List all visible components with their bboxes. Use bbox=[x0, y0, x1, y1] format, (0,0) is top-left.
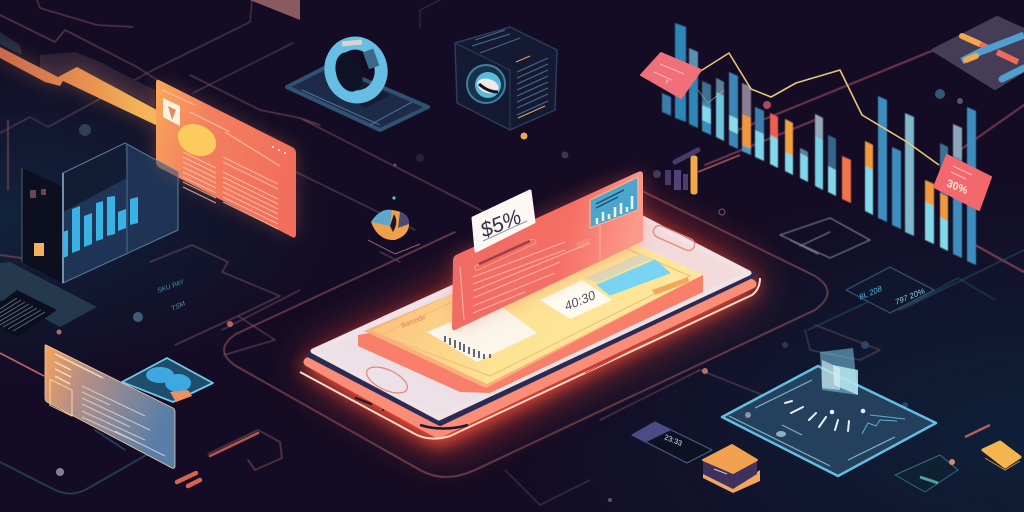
floating folder icon bbox=[820, 348, 858, 395]
panel: glass bar chart box bbox=[22, 143, 178, 283]
card: readout outline right: 8L 208 bbox=[859, 284, 883, 302]
home button bbox=[363, 362, 411, 398]
chart: isometric bars bbox=[662, 23, 976, 265]
icon: small bars and orange cylinder bbox=[653, 150, 740, 195]
header line bbox=[162, 90, 280, 166]
card: small teal card lower right bbox=[895, 455, 958, 492]
card: dark time card bbox=[632, 422, 712, 463]
callout: pink ticket right 30% bbox=[934, 155, 991, 210]
receipt card bbox=[358, 228, 703, 393]
receipt card: Barcode bbox=[400, 314, 427, 330]
blue bars bbox=[63, 196, 138, 258]
chart: trend line bbox=[698, 53, 939, 165]
text: time value: 40:30 bbox=[564, 287, 597, 314]
floating red card bbox=[452, 170, 643, 330]
price tag bbox=[473, 191, 534, 251]
blue box bbox=[597, 260, 670, 295]
panel: bottom left gradient card bbox=[0, 345, 213, 468]
panel: orange document card bbox=[156, 80, 296, 238]
illustration: phone bbox=[300, 205, 766, 450]
callout: pink ticket right 30%: 30% bbox=[945, 177, 969, 197]
top pill bbox=[651, 224, 697, 252]
bezel bbox=[310, 211, 752, 423]
time ticket bbox=[540, 280, 612, 319]
bright edge bbox=[300, 278, 760, 439]
floating red card: 799 bbox=[574, 236, 590, 252]
card: readout outline right bbox=[846, 267, 934, 313]
card text lines bbox=[460, 242, 590, 320]
screen bbox=[313, 209, 749, 418]
text columns bbox=[183, 152, 278, 229]
purple shadow blocks bbox=[40, 52, 155, 108]
icon: small coin connector bbox=[368, 196, 420, 254]
callout: pink ticket left: Y bbox=[663, 79, 669, 86]
accent bars: salmon bbox=[177, 433, 258, 486]
icon tile bbox=[163, 98, 180, 126]
dark box side bbox=[22, 168, 62, 283]
icon: orange cube bbox=[703, 445, 760, 493]
card: readout outline right: 797 20% bbox=[895, 286, 925, 307]
icon: smart ring on platform bbox=[287, 37, 428, 130]
phone glow bbox=[300, 205, 766, 450]
icon: yellow chip right bbox=[965, 425, 1020, 470]
phone rim bbox=[308, 222, 752, 434]
text fragment: left readout bbox=[157, 279, 186, 313]
small dots bbox=[56, 89, 963, 502]
text fragment: left readout: SKU PAY bbox=[157, 279, 185, 295]
callout: pink ticket left bbox=[641, 53, 701, 98]
glass card behind bbox=[122, 358, 213, 402]
mini chart card bbox=[590, 177, 638, 228]
icon: top right chip bbox=[934, 18, 1024, 88]
yellow highlight bbox=[173, 118, 221, 162]
orange pill bbox=[652, 277, 689, 295]
barcode ticket bbox=[427, 303, 537, 362]
trace loop around phone bbox=[224, 190, 828, 477]
floating red card: $5% bbox=[476, 205, 525, 243]
top left orange band bbox=[0, 0, 300, 127]
panel: striped device lower left bbox=[0, 262, 97, 337]
card: dark time card: 23:33 bbox=[663, 432, 683, 448]
icon: data cube with dial bbox=[455, 27, 557, 130]
panel: dial display bbox=[722, 348, 936, 476]
speaker and notch bbox=[356, 398, 371, 404]
input field bbox=[475, 239, 536, 270]
text fragment: left readout: TSM bbox=[171, 300, 186, 313]
